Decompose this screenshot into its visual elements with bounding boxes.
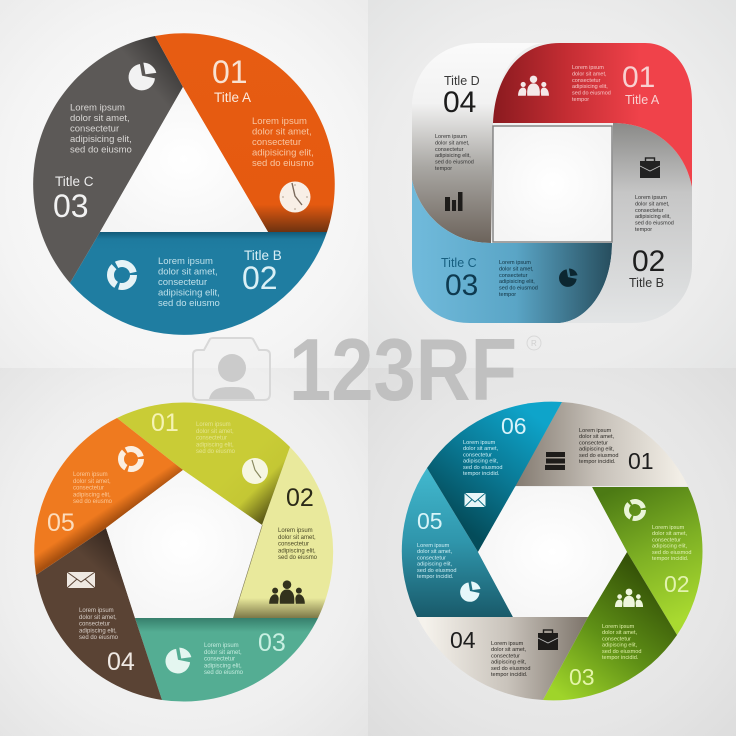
- lorem text B: dolor sit amet,: [158, 266, 218, 278]
- logo text: 123RF: [289, 320, 517, 419]
- lorem text C: consectetur: [499, 273, 528, 279]
- number 04: 04: [443, 86, 476, 119]
- lorem text C: dolor sit amet,: [499, 266, 534, 272]
- lorem text 05: sed do eiusmo: [73, 499, 113, 505]
- lorem text 01: dolor sit amet,: [196, 429, 234, 435]
- segment 06 teal dark: [427, 402, 562, 552]
- lorem text C: tempor: [499, 292, 516, 298]
- number 03: 03: [53, 188, 89, 224]
- number 02: 02: [632, 245, 665, 278]
- lorem text 01: sed do eiusmo: [196, 449, 236, 455]
- lorem text A: adipisicing elit,: [252, 148, 314, 158]
- lorem text 06: dolor sit amet,: [463, 446, 499, 452]
- lorem text D: dolor sit amet,: [435, 140, 470, 146]
- lorem text B: consectetur: [158, 277, 207, 288]
- lorem text C: sed do eiusmod: [499, 286, 538, 292]
- lorem text 04: tempor incidid.: [491, 672, 528, 678]
- number 04: 04: [450, 627, 476, 653]
- centre pentagon: [106, 470, 262, 618]
- number 05: 05: [417, 508, 443, 534]
- number 02: 02: [242, 260, 278, 296]
- segment 03 green: [543, 552, 677, 700]
- lorem text B: sed do eiusmod: [635, 221, 674, 227]
- lorem text B: Lorem ipsum: [158, 256, 213, 267]
- number 03: 03: [258, 629, 286, 657]
- lorem text C: consectetur: [70, 124, 119, 134]
- segment 05 orange: [34, 418, 183, 575]
- icon: pie chart: [460, 582, 480, 602]
- lorem text 04: consectetur: [491, 653, 520, 659]
- title A: Title A: [214, 90, 251, 105]
- lorem text 03: tempor incidid.: [602, 655, 639, 661]
- segment 02 yellow: [233, 447, 333, 618]
- lorem text 03: consectetur: [602, 636, 631, 642]
- registered mark: R: [531, 339, 537, 348]
- lorem text A: Lorem ipsum: [572, 65, 604, 71]
- lorem text D: adipisicing elit,: [435, 153, 471, 159]
- lorem text 05: sed do eiusmod: [417, 568, 456, 574]
- icon: cycle arrows: [626, 502, 644, 518]
- title D: Title D: [444, 74, 480, 88]
- background tile bottom right: [368, 368, 736, 736]
- lorem text C: Lorem ipsum: [70, 102, 125, 114]
- segment 01 red: [493, 43, 692, 187]
- lorem text 04: Lorem ipsum: [79, 608, 114, 614]
- icon: pie chart: [559, 268, 578, 287]
- lorem text 04: sed do eiusmod: [491, 666, 530, 672]
- registered mark: [527, 336, 541, 350]
- lorem text 02: sed do eiusmo: [278, 555, 318, 561]
- lorem text 04: consectetur: [79, 622, 110, 628]
- lorem text 03: dolor sit amet,: [204, 650, 242, 656]
- lorem text 01: Lorem ipsum: [579, 428, 612, 434]
- lorem text 02: Lorem ipsum: [278, 528, 313, 534]
- centre triangle: [100, 87, 268, 232]
- segment 05 teal: [402, 468, 513, 617]
- lorem text 03: dolor sit amet,: [602, 630, 638, 636]
- lorem text D: sed do eiusmod: [435, 160, 474, 166]
- icon: cycle arrows: [110, 264, 134, 286]
- lorem text 06: adipiscing elit,: [463, 459, 499, 465]
- lorem text 05: tempor incidid.: [417, 574, 454, 580]
- lorem text 05: Lorem ipsum: [73, 472, 108, 478]
- lorem text B: adipisicing elit,: [158, 288, 220, 298]
- panel: six-part circle: [402, 402, 702, 700]
- icon: briefcase: [640, 158, 660, 178]
- lorem text 02: consectetur: [652, 537, 681, 543]
- title B: Title B: [629, 276, 664, 290]
- title B: Title B: [244, 248, 282, 263]
- lorem text C: adipisicing elit,: [499, 279, 535, 285]
- lorem text 01: consectetur: [579, 440, 608, 446]
- title C: Title C: [55, 174, 94, 189]
- lorem text B: Lorem ipsum: [635, 195, 667, 201]
- lorem text 05: dolor sit amet,: [417, 549, 453, 555]
- lorem text A: sed do eiusmo: [252, 158, 314, 169]
- lorem text 05: adipiscing elit,: [417, 562, 453, 568]
- number 01: 01: [151, 409, 179, 437]
- lorem text 02: consectetur: [278, 542, 309, 548]
- lorem text A: tempor: [572, 97, 589, 103]
- lorem text 01: tempor incidid.: [579, 459, 616, 465]
- lorem text 03: Lorem ipsum: [602, 624, 635, 630]
- lorem text 03: consectetur: [204, 657, 235, 663]
- lorem text 06: Lorem ipsum: [463, 440, 496, 446]
- icon: books: [545, 452, 565, 470]
- lorem text 05: consectetur: [417, 555, 446, 561]
- number 02: 02: [664, 571, 690, 597]
- lorem text B: sed do eiusmo: [158, 298, 220, 309]
- lorem text 02: dolor sit amet,: [278, 535, 316, 541]
- lorem text D: tempor: [435, 166, 452, 172]
- number 02: 02: [286, 484, 314, 512]
- title C: Title C: [441, 256, 477, 270]
- background tile top left: [0, 0, 368, 368]
- lorem text B: adipisicing elit,: [635, 214, 671, 220]
- lorem text 01: adipiscing elit,: [579, 447, 615, 453]
- icon: cycle arrows: [121, 449, 141, 469]
- icon: bar chart: [445, 192, 462, 211]
- segment 01 olive: [117, 403, 290, 525]
- icon: pie chart: [165, 648, 191, 673]
- lorem text 01: sed do eiusmod: [579, 453, 618, 459]
- segment 02 blue: [70, 232, 327, 335]
- lorem text A: adipisicing elit,: [572, 84, 608, 90]
- icon: pie chart: [129, 63, 156, 90]
- lorem text 05: adipiscing elit,: [73, 492, 111, 498]
- lorem text A: Lorem ipsum: [252, 116, 307, 127]
- lorem text 04: dolor sit amet,: [79, 615, 117, 621]
- centre hexagon: [478, 487, 627, 617]
- segment 03 blue: [412, 180, 612, 323]
- lorem text 02: dolor sit amet,: [652, 531, 688, 537]
- icon: people: [269, 580, 305, 604]
- lorem text D: Lorem ipsum: [435, 134, 467, 140]
- lorem text 05: consectetur: [73, 486, 104, 492]
- segment 02 grey: [560, 123, 692, 323]
- lorem text A: dolor sit amet,: [252, 126, 312, 138]
- icon: people: [615, 589, 643, 607]
- icon: people: [518, 76, 549, 96]
- panel: three-part circle: [33, 33, 335, 335]
- segment 03 grey: [33, 36, 183, 283]
- icon: envelope: [464, 493, 486, 507]
- segment 01 beige: [515, 402, 688, 486]
- lorem text 01: Lorem ipsum: [196, 422, 231, 428]
- lorem text 03: adipiscing elit,: [602, 643, 638, 649]
- lorem text 03: sed do eiusmo: [204, 670, 244, 676]
- number 01: 01: [622, 61, 655, 94]
- lorem text 05: Lorem ipsum: [417, 543, 450, 549]
- lorem text 06: consectetur: [463, 452, 492, 458]
- lorem text 02: adipiscing elit,: [652, 544, 688, 550]
- segment 04 white: [412, 43, 547, 243]
- panel: five-part circle: [34, 403, 333, 702]
- segment 02 green: [592, 487, 702, 635]
- lorem text 04: adipiscing elit,: [79, 628, 117, 634]
- segment 04 beige: [417, 617, 588, 700]
- icon: clock: [280, 182, 310, 212]
- number 03: 03: [445, 269, 478, 302]
- lorem text 02: adipiscing elit,: [278, 548, 316, 554]
- icon: camera outline: [193, 338, 270, 400]
- lorem text 02: sed do eiusmod: [652, 550, 692, 556]
- lorem text A: consectetur: [572, 78, 601, 84]
- lorem text C: sed do eiusmo: [70, 144, 132, 156]
- lorem text C: adipisicing elit,: [70, 134, 132, 145]
- lorem text 01: adipiscing elit,: [196, 442, 234, 448]
- number 04: 04: [107, 648, 135, 676]
- lorem text B: dolor sit amet,: [635, 201, 670, 207]
- lorem text A: dolor sit amet,: [572, 71, 607, 77]
- segment 03 teal: [135, 618, 318, 702]
- icon: clock: [242, 458, 268, 484]
- number 06: 06: [501, 413, 527, 439]
- title A: Title A: [625, 93, 660, 107]
- lorem text 06: sed do eiusmod: [463, 465, 502, 471]
- segment 01 orange: [155, 33, 335, 232]
- lorem text 04: sed do eiusmo: [79, 635, 119, 641]
- number 03: 03: [569, 664, 595, 690]
- centre square: [493, 126, 612, 242]
- watermark: 123RF logo: [193, 320, 541, 419]
- background tile bottom left: [0, 368, 368, 736]
- lorem text 06: tempor incidid.: [463, 471, 500, 477]
- lorem text 03: sed do eiusmod: [602, 649, 642, 655]
- lorem text B: tempor: [635, 227, 652, 233]
- lorem text A: consectetur: [252, 137, 301, 148]
- lorem text 04: adipiscing elit,: [491, 660, 527, 666]
- segment 04 brown: [36, 528, 162, 700]
- lorem text 03: Lorem ipsum: [204, 643, 239, 649]
- icon: briefcase: [538, 630, 558, 650]
- lorem text D: consectetur: [435, 147, 464, 153]
- lorem text C: Lorem ipsum: [499, 260, 531, 266]
- background tile top right: [368, 0, 736, 368]
- lorem text 04: Lorem ipsum: [491, 641, 524, 647]
- lorem text 02: Lorem ipsum: [652, 525, 685, 531]
- lorem text 05: dolor sit amet,: [73, 479, 111, 485]
- lorem text 01: dolor sit amet,: [579, 434, 615, 440]
- lorem text 03: adipiscing elit,: [204, 663, 242, 669]
- lorem text A: sed do eiusmod: [572, 91, 611, 97]
- lorem text 02: tempor incidid.: [652, 556, 689, 562]
- panel: four-part rounded square: [412, 43, 692, 323]
- icon: envelope: [67, 572, 95, 588]
- lorem text B: consectetur: [635, 208, 664, 214]
- lorem text C: dolor sit amet,: [70, 113, 130, 124]
- lorem text 04: dolor sit amet,: [491, 647, 527, 653]
- number 05: 05: [47, 509, 75, 537]
- number 01: 01: [212, 54, 248, 90]
- number 01: 01: [628, 448, 654, 474]
- lorem text 01: consectetur: [196, 436, 227, 442]
